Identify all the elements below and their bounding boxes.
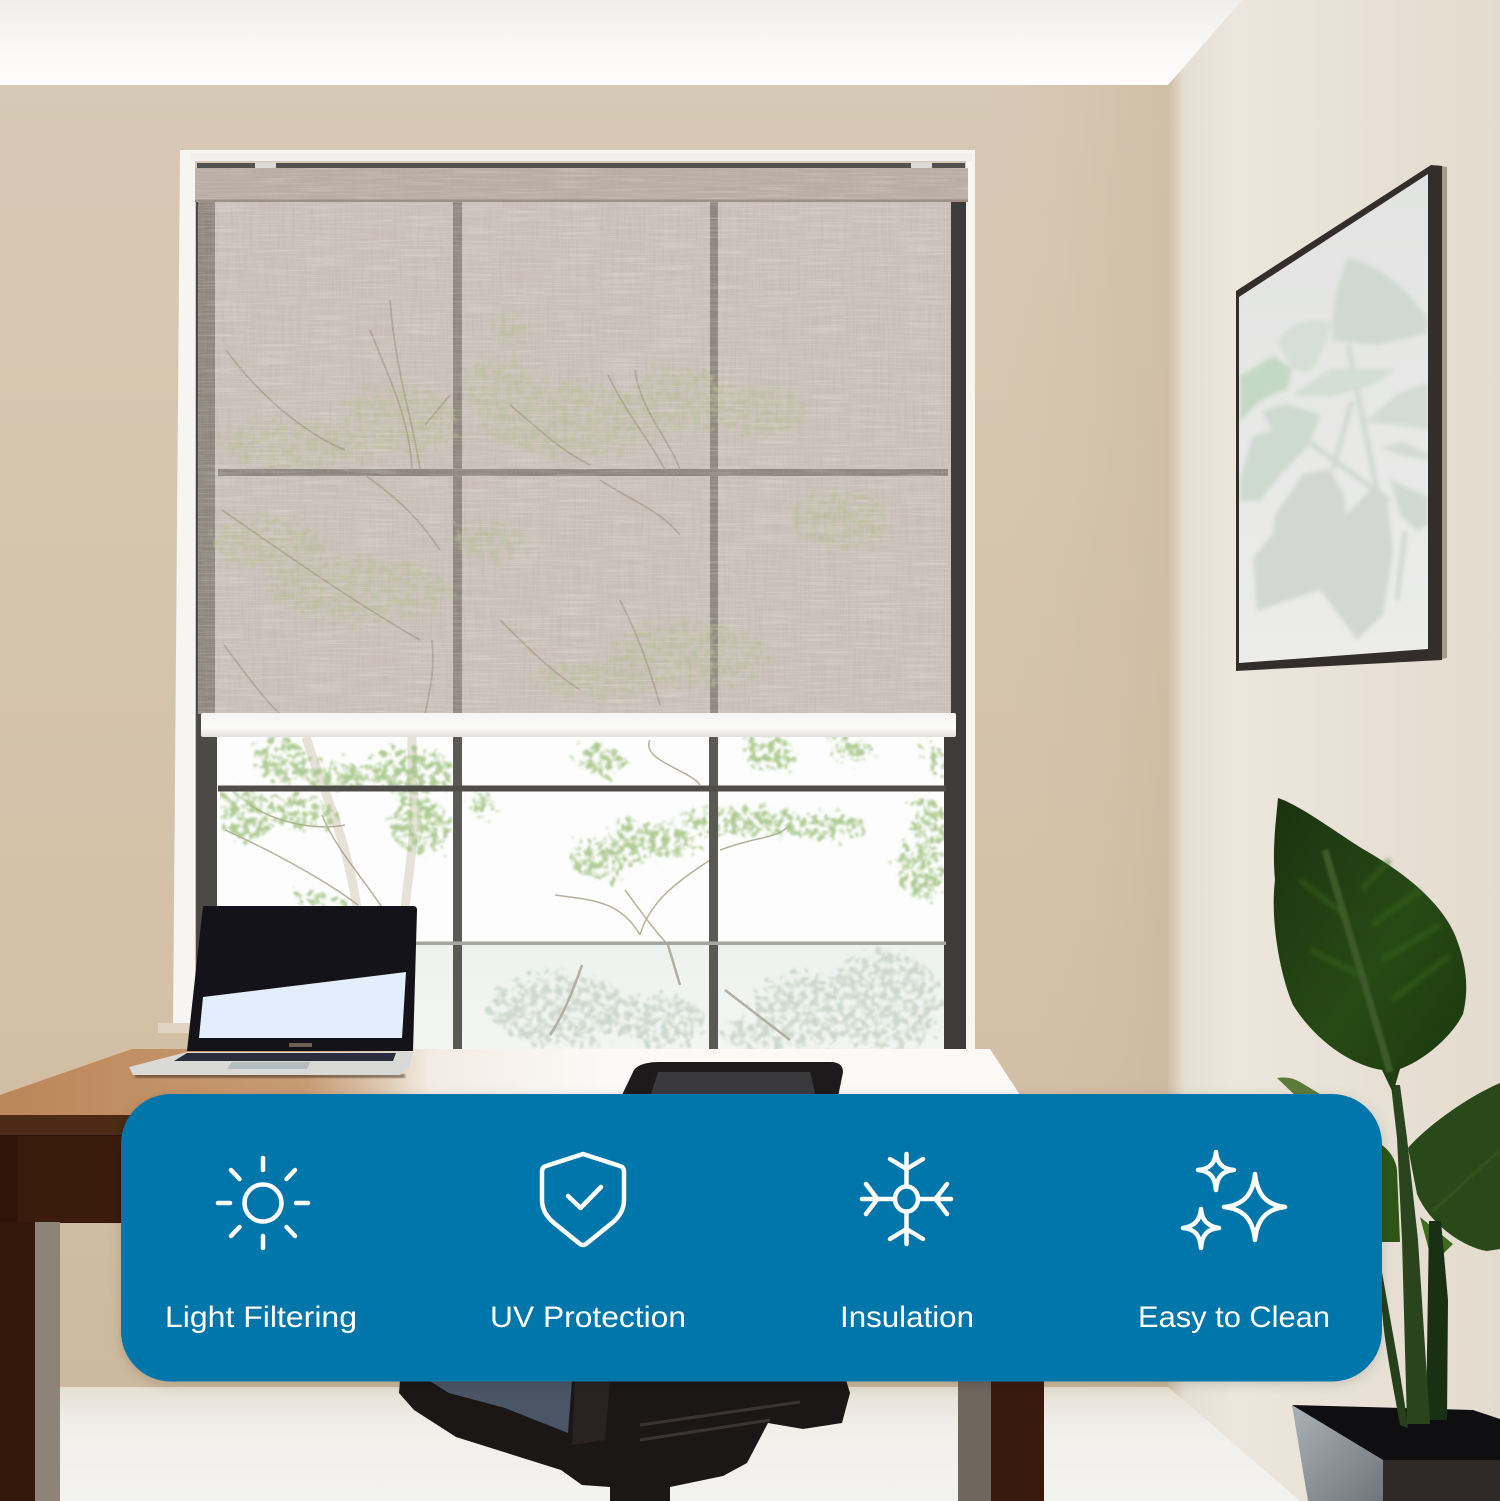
feature: light filtering [165, 1158, 357, 1334]
left leg light [35, 1222, 60, 1501]
desk top [0, 1049, 1022, 1116]
left leg dark [0, 1222, 35, 1501]
left cluster leaf [1240, 404, 1320, 501]
label: uv protection: UV Protection [490, 1301, 686, 1334]
desk front edge [0, 1115, 300, 1136]
right leaf [1408, 1083, 1500, 1251]
laptop [129, 906, 417, 1078]
small leaf behind panel [1382, 1145, 1400, 1242]
laptop shadow [135, 1074, 405, 1078]
laptop lid [187, 906, 417, 1051]
laptop keyboard [174, 1053, 396, 1061]
tree seen through fabric [214, 300, 890, 714]
pot front [1383, 1460, 1500, 1501]
foliage [217, 734, 948, 906]
pot left face [1292, 1405, 1383, 1501]
leaf midrib [1325, 850, 1390, 1072]
bottom rail [201, 713, 956, 737]
shade roll [195, 168, 968, 202]
top rail [190, 153, 972, 161]
back leaf tip [1277, 1078, 1330, 1100]
feature: easy to clean [1138, 1152, 1330, 1334]
desk [0, 1049, 1044, 1501]
stems [1310, 345, 1408, 600]
picture frame [1236, 165, 1447, 671]
outside trees [217, 734, 948, 1051]
label: easy to clean: Easy to Clean [1138, 1301, 1330, 1334]
armrest detail [572, 1380, 610, 1445]
ceiling [0, 0, 1242, 85]
artwork background [1239, 174, 1428, 663]
artwork leaves [1240, 258, 1428, 640]
right leg dark [991, 1370, 1044, 1501]
lower frosted glass [220, 945, 945, 1050]
window [158, 150, 975, 1051]
desk apron [0, 1135, 300, 1223]
green leaf [1240, 356, 1292, 422]
feature: uv protection [490, 1154, 686, 1334]
small lower leaf [1420, 1217, 1453, 1254]
icon: snowflake [862, 1154, 951, 1244]
floor [0, 1387, 1300, 1501]
frosted foliage [490, 950, 941, 1051]
chair seat [399, 1380, 850, 1501]
label: light filtering: Light Filtering [165, 1301, 357, 1334]
chair back [621, 1062, 843, 1097]
screen reflection [199, 972, 406, 1038]
lower right leaf [1390, 479, 1428, 531]
label: insulation: Insulation [840, 1301, 974, 1334]
big bottom leaf [1253, 469, 1393, 640]
laptop logo [289, 1043, 312, 1047]
big leaf [1274, 798, 1466, 1093]
mullions [453, 737, 462, 1050]
right leaf [1365, 383, 1428, 429]
seat cushion [428, 1380, 572, 1433]
feature: insulation [840, 1154, 974, 1334]
laptop trackpad [227, 1062, 310, 1069]
top fan leaf [1333, 258, 1427, 345]
frame [1236, 165, 1442, 671]
pot soil [1292, 1405, 1500, 1460]
wood edge [1436, 165, 1447, 660]
pot [1292, 1405, 1500, 1501]
frosted branches [550, 945, 790, 1040]
feature panel [121, 1094, 1382, 1382]
branches [222, 300, 680, 714]
foliage [214, 312, 890, 700]
window white frame [173, 150, 975, 1050]
fabric weave [198, 168, 951, 714]
window side frames [196, 200, 217, 1050]
right leg light [958, 1370, 991, 1501]
back wall [0, 80, 1172, 1390]
pale curled leaf [1277, 320, 1332, 372]
wall shading near corner [990, 85, 1170, 1385]
thin stem [1382, 1272, 1408, 1428]
tree trunks [302, 737, 419, 906]
branches [225, 740, 790, 945]
shade fabric [198, 200, 951, 714]
frame seen through fabric [198, 202, 948, 714]
main stem [1391, 1085, 1430, 1424]
window sill [158, 1023, 194, 1033]
icon: shield with check [542, 1154, 624, 1245]
small right leaf [1380, 442, 1428, 459]
plant [1274, 798, 1500, 1428]
side wall [1168, 0, 1500, 1501]
leaf veins [1300, 860, 1450, 1000]
window glass upper [196, 737, 966, 1050]
roller shade [190, 153, 972, 737]
chair mesh [650, 1072, 816, 1097]
panel background [121, 1094, 1382, 1382]
horizontal leaf [1292, 369, 1397, 397]
laptop base [129, 1052, 413, 1075]
icon: sparkles [1183, 1152, 1285, 1248]
icon: sun [218, 1158, 308, 1248]
second stem [1426, 1221, 1448, 1420]
